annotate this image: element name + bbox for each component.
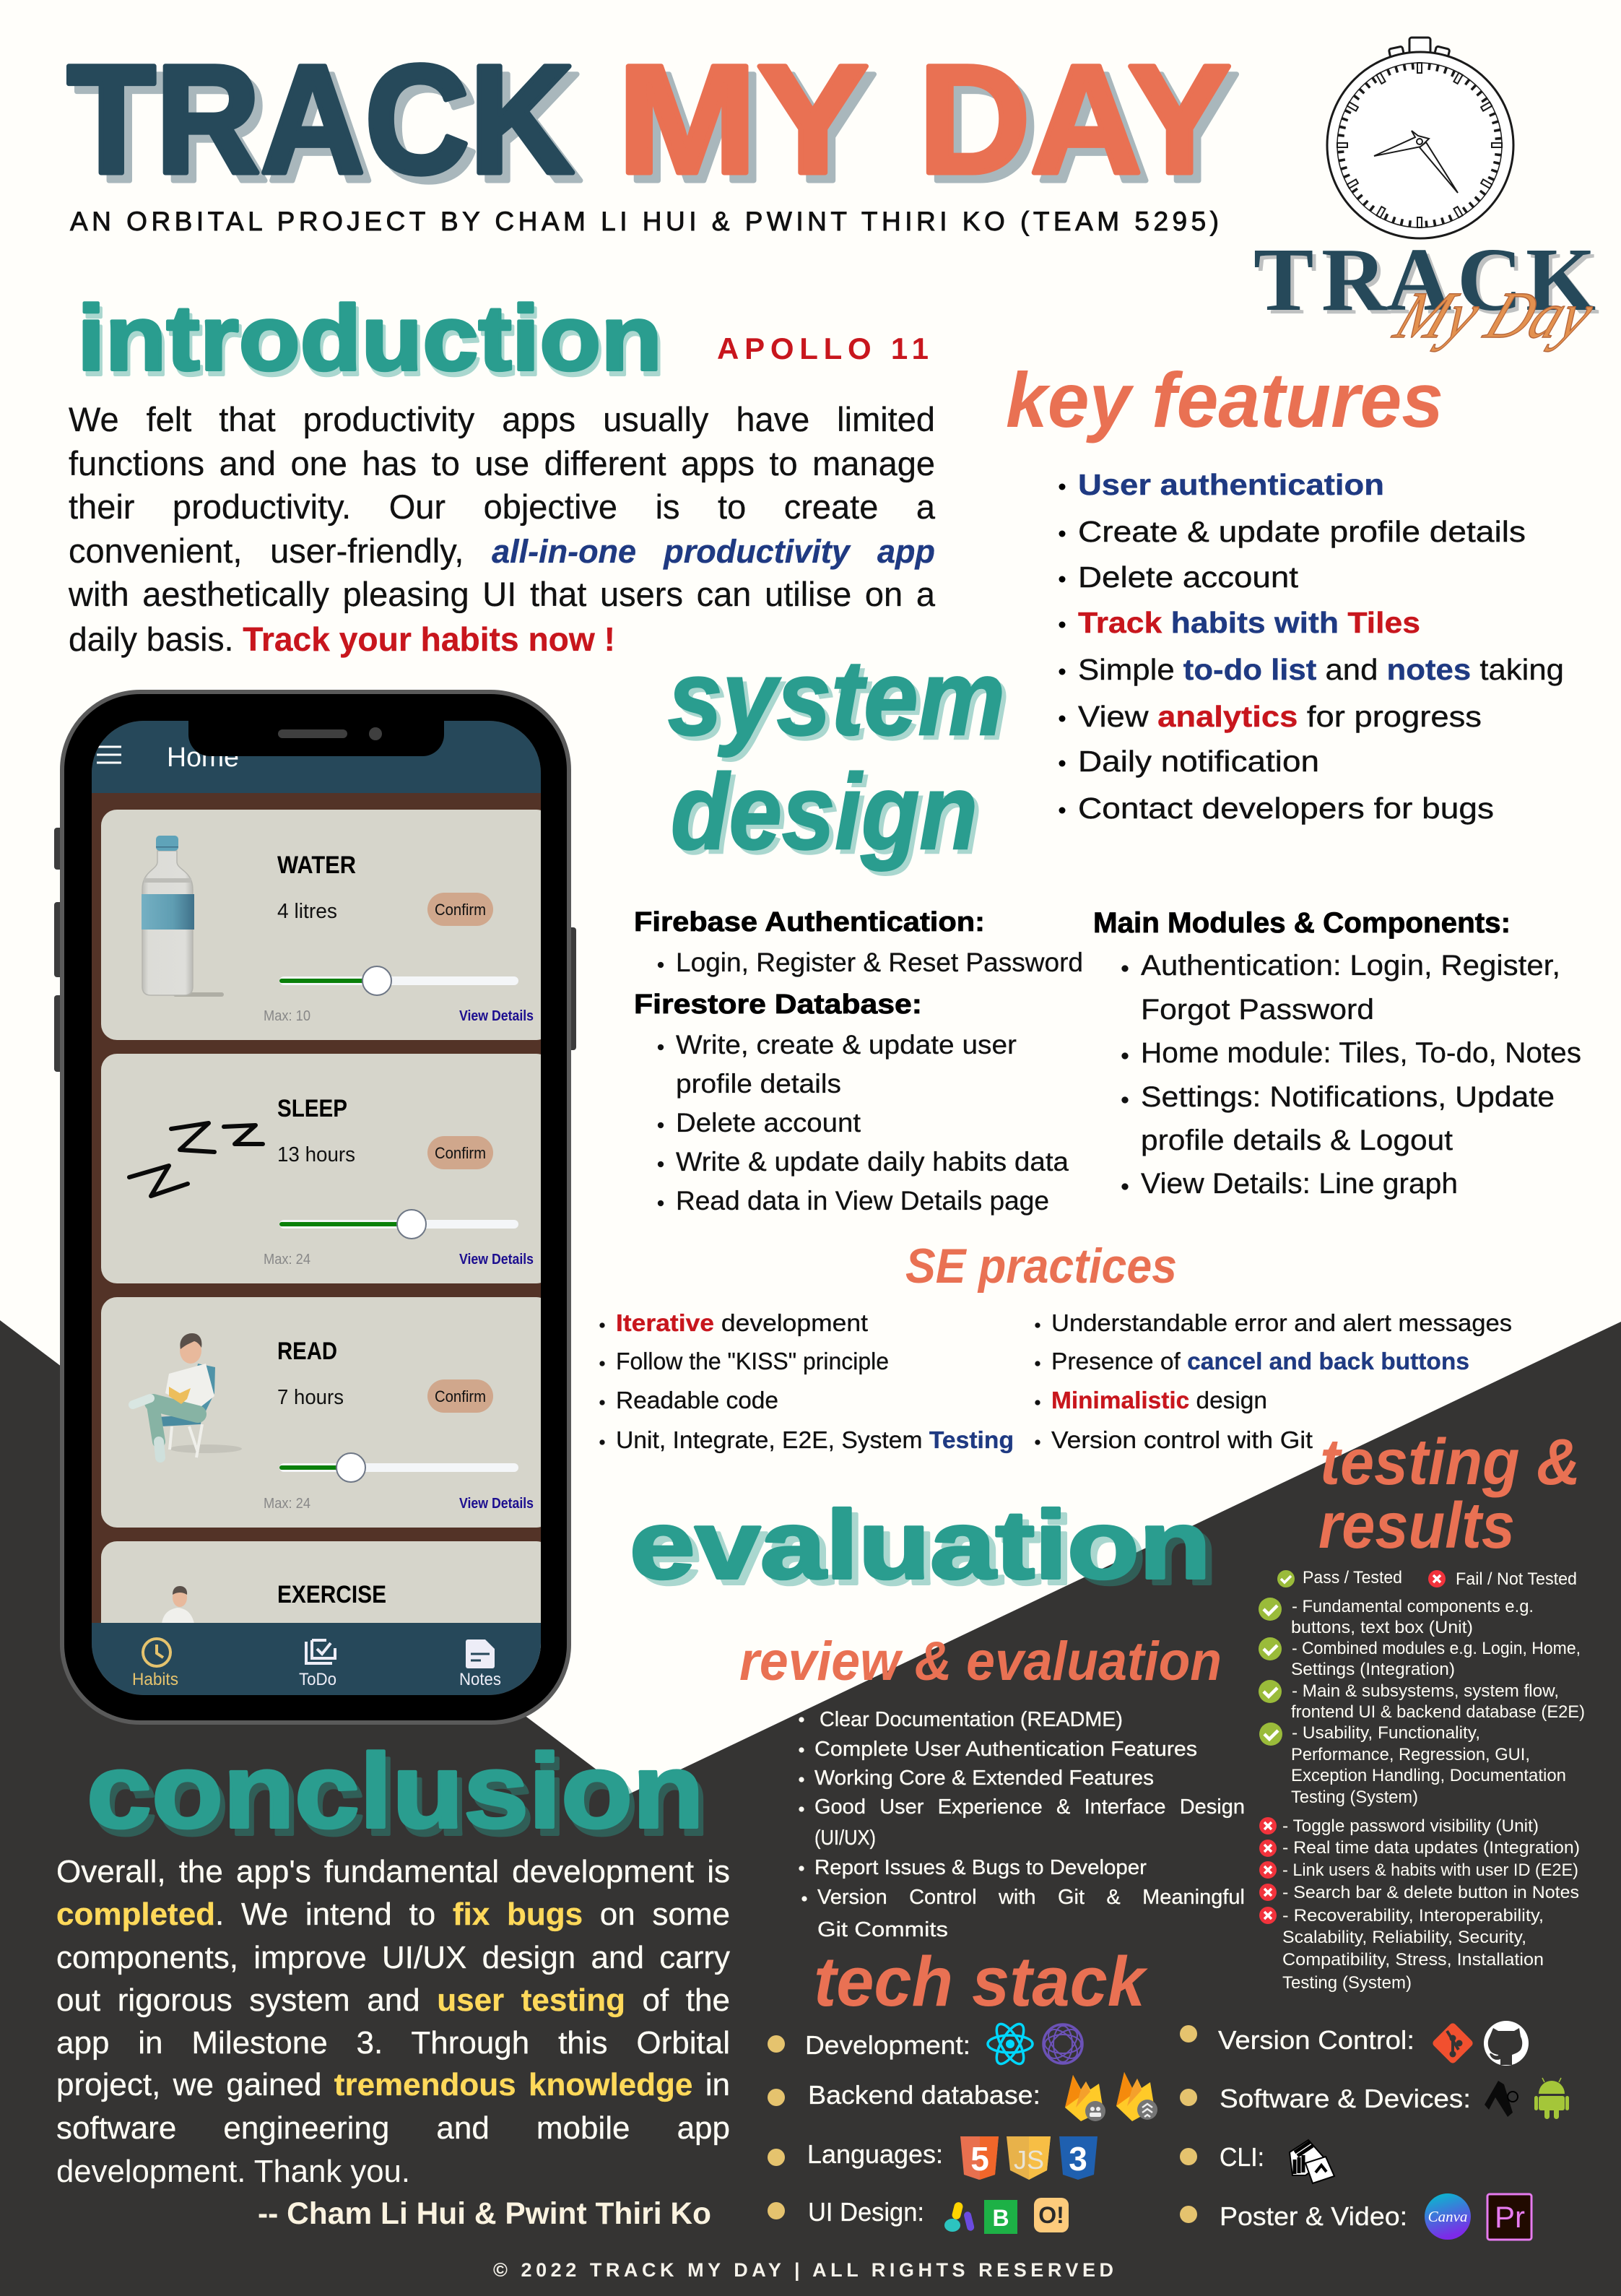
nav icon: todo bbox=[306, 1640, 335, 1663]
bottom navigation: ToDo bbox=[299, 1670, 336, 1689]
text: app in Milestone 3. Through this Orbital bbox=[56, 2025, 730, 2061]
card: water bbox=[101, 810, 552, 1040]
text block: firebase: Write, create & update user bbox=[676, 1030, 1017, 1060]
icon: premiere: Pr bbox=[1495, 2200, 1525, 2234]
phone mockup bbox=[54, 692, 576, 1723]
icon: premiere bbox=[1487, 2194, 1531, 2240]
card: water: Max: 10 bbox=[264, 1008, 310, 1024]
text: convenient, user-friendly, all-in-one productivity app bbox=[69, 532, 935, 570]
icon: canva: Canva bbox=[1428, 2208, 1467, 2225]
text: their productivity. Our objective is to create a bbox=[69, 488, 935, 526]
conclusion last line: development. Thank you. bbox=[56, 2154, 410, 2189]
list: tech stack labels bbox=[768, 2025, 1471, 2231]
title: TRACK bbox=[67, 33, 574, 206]
card: read: Confirm bbox=[435, 1387, 486, 1405]
list: tech stack labels: Version Control: bbox=[1218, 2025, 1414, 2055]
illustration: person reading bbox=[133, 1333, 242, 1457]
list: SE practices: Readable code bbox=[616, 1387, 778, 1413]
list: review and evaluation: Working Core & Extended Features bbox=[814, 1767, 1154, 1790]
card: sleep: 13 hours bbox=[277, 1143, 355, 1166]
icon: javascript bbox=[1007, 2136, 1051, 2180]
phone screen bbox=[92, 721, 552, 1695]
script wordmark: My Day bbox=[1384, 278, 1604, 352]
list: SE practices: Presence of cancel and back buttons bbox=[1051, 1348, 1469, 1374]
list: tech stack labels: UI Design: bbox=[808, 2197, 924, 2227]
heading: testing and results: results bbox=[1318, 1490, 1515, 1562]
icon: javascript: JS bbox=[1014, 2145, 1044, 2175]
list: SE practices: Version control with Git bbox=[1051, 1426, 1313, 1453]
text block: firebase bbox=[634, 907, 1083, 1216]
list: tech stack labels: Development: bbox=[805, 2030, 970, 2060]
list: review and evaluation: Git Commits bbox=[817, 1918, 948, 1941]
list: failed tests: - Recoverability, Interoperability, bbox=[1282, 1906, 1544, 1925]
list: passed tests: Settings (Integration) bbox=[1291, 1660, 1455, 1679]
list: review and evaluation: (UI/UX) bbox=[814, 1827, 876, 1850]
list: SE practices: Unit, Integrate, E2E, System Testing bbox=[616, 1426, 1014, 1453]
text block: firebase: Firebase Authentication: bbox=[634, 907, 985, 937]
dark background shape bbox=[0, 1320, 1621, 2296]
text: components, improve UI/UX design and carry bbox=[56, 1940, 730, 1975]
bottom navigation: Habits bbox=[132, 1670, 178, 1689]
icon: orange tile: O! bbox=[1038, 2202, 1064, 2228]
header title: Home bbox=[167, 742, 239, 773]
heading: review and evaluation: review & evaluation bbox=[739, 1631, 1222, 1692]
list: failed tests: - Search bar & delete button in Notes bbox=[1282, 1883, 1579, 1902]
logo: stopwatch and wordmark bbox=[1253, 38, 1604, 352]
nav icon: habits bbox=[143, 1639, 170, 1666]
icon: react bbox=[988, 2020, 1033, 2068]
signature: -- Cham Li Hui & Pwint Thiri Ko bbox=[258, 2196, 711, 2231]
subtitle: AN ORBITAL PROJECT BY CHAM LI HUI & PWINT THIRI KO (TEAM 5295) bbox=[70, 207, 1219, 236]
card: exercise: EXERCISE bbox=[277, 1581, 386, 1608]
text block: main modules: Forgot Password bbox=[1141, 994, 1374, 1026]
card: exercise bbox=[101, 1541, 552, 1686]
list: passed tests bbox=[1259, 1597, 1585, 1807]
text: project, we gained tremendous knowledge in bbox=[56, 2067, 730, 2102]
app header bbox=[92, 721, 541, 793]
text block: main modules: Authentication: Login, Register, bbox=[1141, 950, 1560, 982]
heading: SE practices: SE practices bbox=[905, 1239, 1177, 1294]
list: passed tests: Testing (System) bbox=[1291, 1788, 1418, 1807]
list: failed tests: Compatibility, Stress, Installation bbox=[1282, 1950, 1544, 1970]
card: sleep: SLEEP bbox=[277, 1095, 347, 1122]
list: SE practices: Iterative development bbox=[616, 1309, 868, 1336]
card: read: 7 hours bbox=[277, 1386, 344, 1409]
menu icon bbox=[97, 747, 121, 763]
title: MY bbox=[617, 33, 869, 206]
icon: firebase firestore bbox=[1116, 2072, 1157, 2121]
illustration: person exercising bbox=[162, 1586, 194, 1624]
list: key features: Contact developers for bugs bbox=[1078, 792, 1494, 825]
icon: css3 bbox=[1059, 2136, 1098, 2180]
list: passed tests: Exception Handling, Documentation bbox=[1291, 1766, 1566, 1785]
text block: main modules bbox=[1093, 907, 1581, 1200]
heading: testing and results bbox=[1318, 1426, 1581, 1562]
list: key features bbox=[1059, 468, 1564, 825]
text block: main modules: Main Modules & Components: bbox=[1093, 907, 1511, 939]
heading: system design bbox=[668, 638, 1005, 872]
card: water: View Details bbox=[459, 1008, 534, 1024]
list: key features: Create & update profile details bbox=[1078, 515, 1526, 548]
card: water: Confirm bbox=[435, 901, 486, 919]
text block: introduction paragraph bbox=[68, 400, 936, 614]
list: SE practices: Follow the "KISS" principle bbox=[616, 1348, 889, 1374]
phone notch bbox=[188, 721, 444, 756]
icon: html5 bbox=[960, 2136, 999, 2180]
bottom navigation bbox=[92, 1623, 541, 1695]
footer copyright: © 2022 TRACK MY DAY | ALL RIGHTS RESERVED bbox=[493, 2259, 1113, 2281]
wordmark: TRACK bbox=[1253, 230, 1596, 330]
text block: firebase: Login, Register & Reset Password bbox=[676, 948, 1083, 977]
legend: pass and fail: Fail / Not Tested bbox=[1456, 1569, 1577, 1589]
text block: firebase: Read data in View Details page bbox=[676, 1186, 1049, 1216]
text: We felt that productivity apps usually have limited bbox=[69, 400, 935, 438]
list: failed tests bbox=[1259, 1816, 1580, 1993]
icon: css3: 3 bbox=[1069, 2140, 1087, 2178]
text block: firebase: Write & update daily habits data bbox=[676, 1147, 1069, 1177]
list: failed tests: - Toggle password visibility (Unit) bbox=[1282, 1816, 1539, 1836]
list: review and evaluation bbox=[799, 1708, 1197, 1941]
list: passed tests: frontend UI & backend database (E2E) bbox=[1291, 1702, 1585, 1722]
text: Overall, the app's fundamental development is bbox=[56, 1854, 730, 1889]
list: failed tests: - Link users & habits with user ID (E2E) bbox=[1282, 1860, 1578, 1880]
list: key features: User authentication bbox=[1078, 468, 1384, 501]
list: tech stack labels: CLI: bbox=[1220, 2142, 1264, 2172]
icon: firebase auth bbox=[1065, 2075, 1105, 2121]
text block: review justified lines bbox=[814, 1795, 1245, 1909]
icon: ui design tool bbox=[944, 2201, 975, 2232]
card: water: WATER bbox=[277, 852, 356, 879]
list: passed tests: - Usability, Functionality, bbox=[1292, 1723, 1480, 1743]
heading: conclusion: conclusion bbox=[87, 1732, 704, 1850]
list: tech stack labels: Poster & Video: bbox=[1220, 2201, 1407, 2231]
label: Apollo 11: APOLLO 11 bbox=[717, 332, 929, 365]
card: read bbox=[101, 1297, 552, 1528]
list: passed tests: buttons, text box (Unit) bbox=[1291, 1618, 1473, 1637]
card: sleep bbox=[101, 1054, 552, 1283]
text: out rigorous system and user testing of the bbox=[56, 1983, 730, 2018]
list: key features: Daily notification bbox=[1078, 745, 1319, 778]
card: read: READ bbox=[277, 1338, 337, 1365]
list: failed tests: Scalability, Reliability, Security, bbox=[1282, 1928, 1526, 1947]
list: SE practices: Understandable error and alert messages bbox=[1051, 1309, 1512, 1336]
title bbox=[67, 33, 1231, 206]
list: key features: View analytics for progress bbox=[1078, 700, 1482, 733]
text: functions and one has to use different apps to manage bbox=[69, 444, 935, 482]
list: review and evaluation: Clear Documentation (README) bbox=[820, 1708, 1123, 1731]
icon: cli stacks bbox=[1290, 2140, 1334, 2183]
heading: evaluation: evaluation bbox=[630, 1491, 1211, 1599]
card: sleep: Confirm bbox=[435, 1144, 486, 1162]
nav icon: notes bbox=[466, 1639, 495, 1668]
icon: green balsamiq tile bbox=[984, 2200, 1017, 2234]
card: read: Max: 24 bbox=[264, 1496, 310, 1512]
icon: android bbox=[1534, 2078, 1569, 2119]
phone body bbox=[62, 692, 569, 1723]
heading: testing and results: testing & bbox=[1320, 1426, 1581, 1499]
text: completed. We intend to fix bugs on some bbox=[56, 1897, 730, 1932]
list: review and evaluation: Complete User Authentication Features bbox=[814, 1738, 1197, 1761]
list: key features: Simple to-do list and notes taking bbox=[1078, 653, 1564, 686]
list: passed tests: - Combined modules e.g. Login, Home, bbox=[1292, 1639, 1581, 1658]
list: tech stack labels: Backend database: bbox=[808, 2080, 1040, 2110]
text: software engineering and mobile app bbox=[56, 2110, 730, 2146]
text block: main modules: Home module: Tiles, To-do, Notes bbox=[1141, 1037, 1581, 1069]
list: review and evaluation: Report Issues & Bugs to Developer bbox=[814, 1856, 1147, 1879]
icon: git bbox=[1431, 2022, 1474, 2065]
card: read: View Details bbox=[459, 1496, 534, 1512]
list: passed tests: - Fundamental components e.g. bbox=[1292, 1597, 1534, 1616]
card: sleep: Max: 24 bbox=[264, 1252, 310, 1268]
heading: tech stack: tech stack bbox=[814, 1942, 1148, 2021]
icon: canva bbox=[1425, 2193, 1471, 2240]
text block: main modules: View Details: Line graph bbox=[1141, 1168, 1458, 1200]
heading: introduction: introduction bbox=[77, 287, 662, 390]
heading: system design: system bbox=[668, 638, 1005, 758]
legend: pass and fail bbox=[1277, 1568, 1577, 1589]
illustration: zzz bbox=[129, 1123, 263, 1196]
title: DAY bbox=[918, 33, 1231, 206]
list: passed tests: Performance, Regression, GUI, bbox=[1291, 1745, 1530, 1764]
text block: main modules: Settings: Notifications, Update bbox=[1141, 1081, 1555, 1113]
icon: green balsamiq tile: B bbox=[992, 2205, 1009, 2231]
bottom navigation: Notes bbox=[459, 1670, 501, 1689]
icon: orange tile bbox=[1034, 2198, 1069, 2232]
legend: pass and fail: Pass / Tested bbox=[1303, 1568, 1402, 1587]
icon: stopwatch bbox=[1327, 38, 1513, 238]
text block: firebase: Firestore Database: bbox=[634, 989, 922, 1020]
icon: purple orbit ring bbox=[1043, 2024, 1082, 2063]
card: sleep: View Details bbox=[459, 1252, 534, 1268]
list: passed tests: - Main & subsystems, system flow, bbox=[1292, 1681, 1559, 1701]
text block: main modules: profile details & Logout bbox=[1141, 1125, 1453, 1156]
list: SE practices: Minimalistic design bbox=[1051, 1387, 1267, 1413]
text block: firebase: profile details bbox=[676, 1069, 841, 1099]
illustration: bottle bbox=[142, 836, 224, 997]
list: SE practices bbox=[599, 1309, 1512, 1453]
list: tech stack labels: Languages: bbox=[807, 2139, 943, 2169]
heading: system design: design bbox=[671, 753, 978, 872]
text block: firebase: Delete account bbox=[676, 1108, 861, 1138]
list: key features: Track habits with Tiles bbox=[1078, 606, 1420, 639]
intro last line: daily basis. Track your habits now ! bbox=[69, 620, 615, 658]
phone side buttons bbox=[54, 828, 576, 1072]
text block: conclusion paragraph bbox=[56, 1854, 731, 2146]
text: with aesthetically pleasing UI that users can utilise on a bbox=[69, 575, 935, 613]
list: tech stack labels: Software & Devices: bbox=[1220, 2084, 1471, 2113]
list: failed tests: Testing (System) bbox=[1282, 1973, 1412, 1993]
text: Version Control with Git & Meaningful bbox=[817, 1886, 1245, 1909]
text: Good User Experience & Interface Design bbox=[814, 1795, 1245, 1819]
card: water: 4 litres bbox=[277, 900, 337, 923]
icon: black tool bbox=[1485, 2081, 1518, 2117]
icon: github bbox=[1484, 2021, 1529, 2066]
heading: key features: key features bbox=[1006, 356, 1443, 443]
list: failed tests: - Real time data updates (Integration) bbox=[1282, 1838, 1580, 1858]
icon: html5: 5 bbox=[970, 2140, 989, 2178]
list: key features: Delete account bbox=[1078, 560, 1299, 594]
